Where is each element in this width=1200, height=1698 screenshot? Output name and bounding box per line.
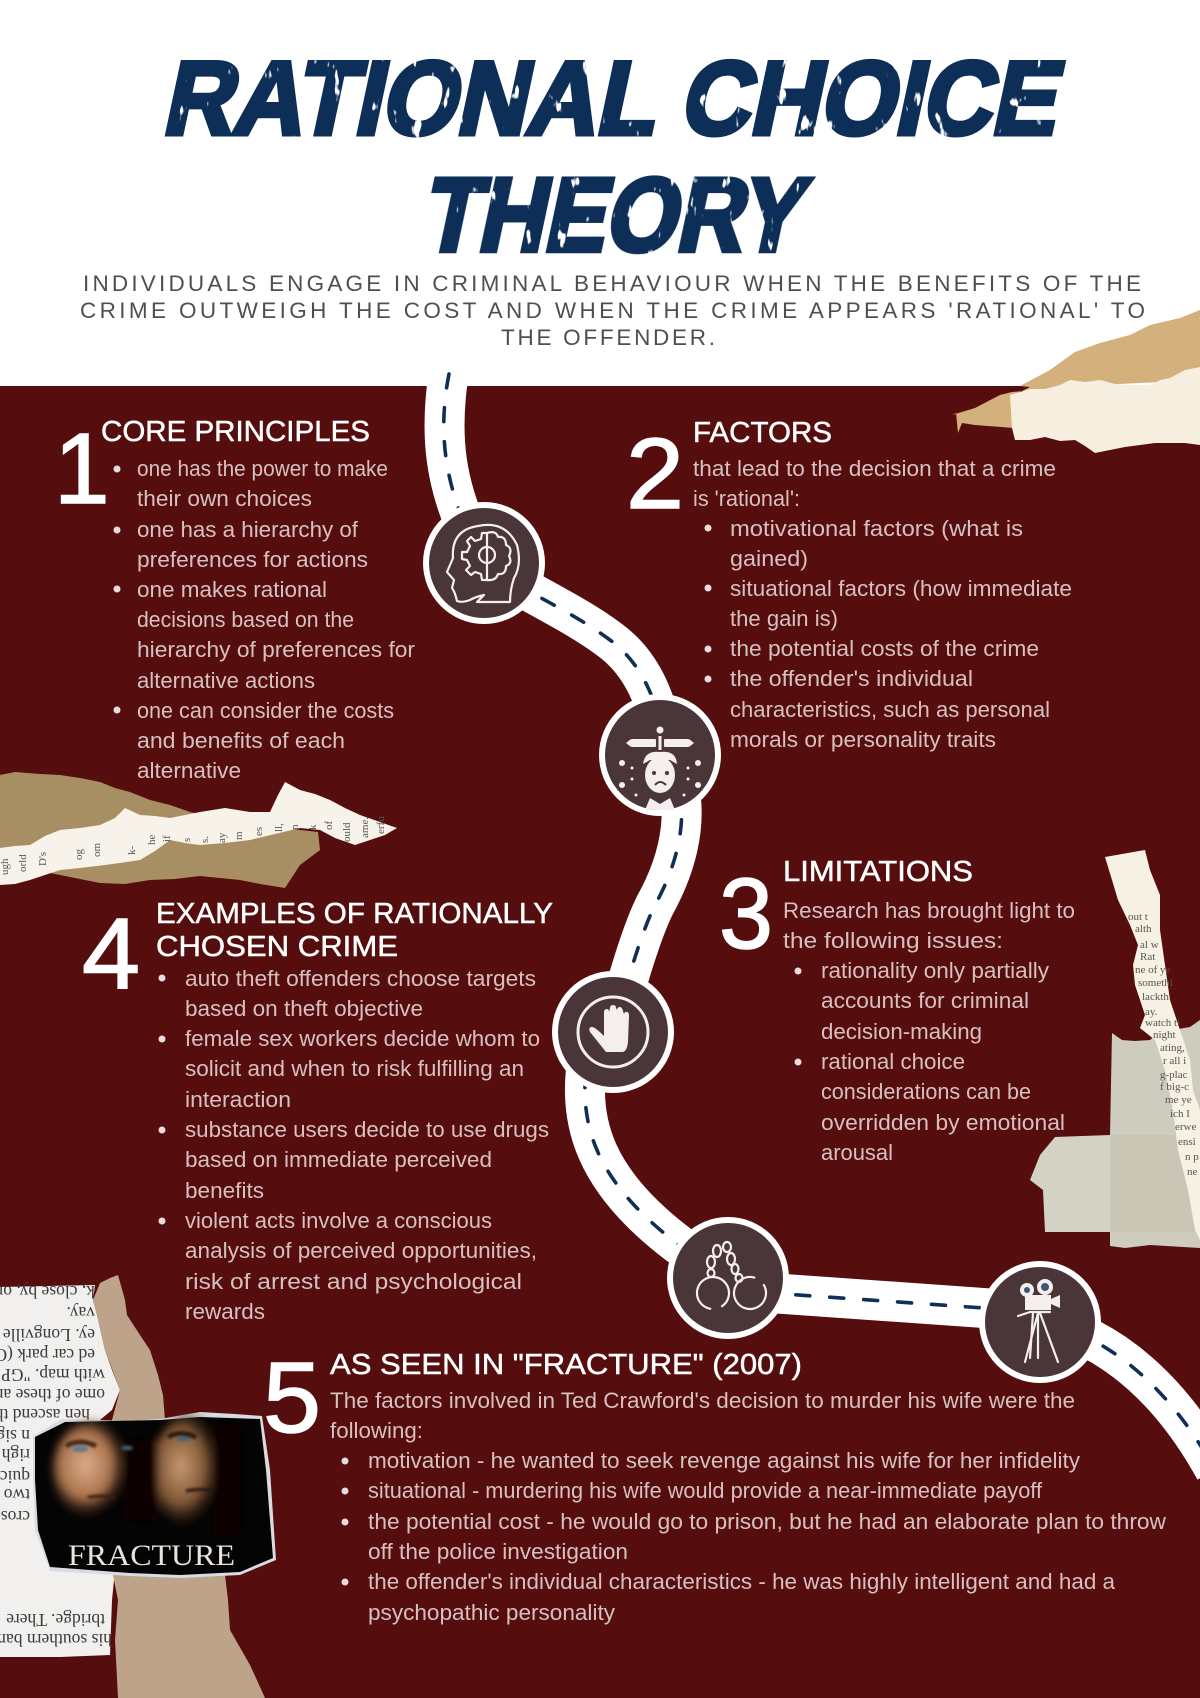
section 5: as seen in Fracture: psychopathic personality	[368, 1600, 615, 1625]
section 2: factors	[626, 417, 1072, 752]
section 2: factors: situational factors (how immediate	[730, 576, 1072, 601]
section 5: as seen in Fracture: The factors involved in Ted Crawford's decision to murder his wife were the	[330, 1388, 1075, 1413]
section 5: as seen in Fracture: motivation - he wanted to seek revenge against his wife for her infidelity	[368, 1448, 1080, 1473]
torn paper: right side tape and page: erwe	[1175, 1121, 1196, 1133]
torn paper and movie poster: bottom left collage: vay.	[66, 1303, 95, 1323]
torn paper: right side tape and page: somethi	[1138, 977, 1173, 989]
section 5: as seen in Fracture: the potential cost - he would go to prison, but he had an elaborate plan to throw	[368, 1509, 1166, 1534]
section 2: factors: morals or personality traits	[730, 727, 996, 752]
torn paper: right side tape and page: out t	[1128, 911, 1148, 923]
torn paper: right side tape and page	[1030, 850, 1200, 1248]
section 1: core principles: alternative	[137, 758, 241, 783]
node: handcuffs icon	[667, 1217, 789, 1339]
torn paper: middle left: n	[289, 824, 301, 830]
section 1: core principles: alternative actions	[137, 668, 315, 693]
section 4: examples of rationally chosen crime: solicit and when to risk fulfilling an	[185, 1056, 524, 1081]
section 4: examples of rationally chosen crime: risk of arrest and psychological	[185, 1269, 522, 1294]
section 3: limitations: accounts for criminal	[821, 988, 1029, 1013]
section 2: factors: the offender's individual	[730, 666, 973, 691]
section 4: examples of rationally chosen crime: auto theft offenders choose targets	[185, 966, 536, 991]
node: person at signpost icon	[599, 694, 721, 816]
section 3: limitations: 3	[719, 858, 773, 970]
torn paper: right side tape and page: ating,	[1160, 1042, 1185, 1054]
section 4: examples of rationally chosen crime: benefits	[185, 1178, 264, 1203]
section 2: factors: is 'rational':	[693, 486, 800, 511]
torn paper: right side tape and page: n p	[1185, 1151, 1199, 1163]
section 3: limitations: considerations can be	[821, 1079, 1031, 1104]
torn paper: right side tape and page: r all i	[1163, 1055, 1186, 1067]
section 3: limitations	[719, 856, 1075, 1165]
torn paper and movie poster: bottom left collage: righ	[2, 1445, 30, 1465]
section 1: core principles: one makes rational	[137, 577, 327, 602]
title: RATIONAL CHOICE	[156, 41, 1074, 157]
section 3: limitations: rational choice	[821, 1049, 965, 1074]
section 4: examples of rationally chosen crime: EXAMPLES OF RATIONALLY	[156, 898, 553, 930]
torn paper: right side tape and page: g-plac	[1160, 1069, 1188, 1081]
section 4: examples of rationally chosen crime: female sex workers decide whom to	[185, 1026, 540, 1051]
node: film camera on tripod icon	[979, 1261, 1101, 1383]
section 5: as seen in Fracture: 5	[263, 1342, 321, 1454]
torn paper: right side tape and page: f big-c	[1160, 1081, 1189, 1093]
section 3: limitations: arousal	[821, 1140, 893, 1165]
torn paper: middle left: ame.	[359, 817, 371, 838]
torn paper: right side tape and page: ay.	[1145, 1006, 1158, 1018]
torn paper: right side tape and page: ne	[1187, 1166, 1198, 1178]
torn paper: middle left: k-	[126, 846, 138, 855]
section 2: factors: 2	[626, 418, 684, 530]
section 1: core principles: preferences for actions	[137, 547, 368, 572]
section 5: as seen in Fracture: the offender's individual characteristics - he was highly intelligent and had a	[368, 1569, 1116, 1594]
torn paper: right side tape and page: alth	[1135, 923, 1152, 935]
torn paper and movie poster: bottom left collage	[0, 1275, 276, 1698]
torn paper: top right	[952, 310, 1200, 453]
section 1: core principles: one has a hierarchy of	[137, 517, 359, 542]
torn paper: middle left: if	[161, 835, 173, 842]
section 2: factors: gained)	[730, 546, 808, 571]
section 4: examples of rationally chosen crime: based on theft objective	[185, 996, 423, 1021]
section 4: examples of rationally chosen crime: rewards	[185, 1299, 265, 1324]
section 4: examples of rationally chosen crime: substance users decide to use drugs	[185, 1117, 549, 1142]
section 5: as seen in Fracture: situational - murdering his wife would provide a near-immediate payoff	[368, 1478, 1043, 1503]
section 3: limitations: LIMITATIONS	[783, 856, 973, 888]
section 4: examples of rationally chosen crime: analysis of perceived opportunities,	[185, 1238, 537, 1263]
torn paper: middle left: ll,	[273, 823, 285, 832]
torn paper: middle left: s.	[199, 836, 211, 843]
section 2: factors: the gain is)	[730, 606, 838, 631]
torn paper: middle left: of	[323, 820, 335, 830]
section 5: as seen in Fracture: following:	[330, 1418, 423, 1443]
torn paper and movie poster: bottom left collage: FRACTURE	[68, 1539, 235, 1572]
torn paper: middle left: orld	[17, 854, 29, 872]
torn paper and movie poster: bottom left collage: quic	[0, 1467, 30, 1487]
torn paper: middle left: es	[253, 827, 265, 836]
section 3: limitations: rationality only partially	[821, 958, 1049, 983]
torn paper: middle left	[0, 772, 397, 888]
torn paper and movie poster: bottom left collage: cros	[1, 1507, 30, 1527]
section 3: limitations: decision-making	[821, 1019, 982, 1044]
section 1: core principles: and benefits of each	[137, 728, 345, 753]
section 1: core principles: CORE PRINCIPLES	[101, 416, 370, 448]
section 3: limitations: overridden by emotional	[821, 1110, 1065, 1135]
title	[156, 41, 1074, 274]
section 2: factors: motivational factors (what is	[730, 516, 1023, 541]
torn paper: middle left: D's	[37, 852, 49, 866]
section 1: core principles: hierarchy of preferences for	[137, 637, 415, 662]
torn paper: right side tape and page: ich I	[1170, 1108, 1190, 1120]
section 4: examples of rationally chosen crime: 4	[82, 898, 140, 1010]
section 4: examples of rationally chosen crime: based on immediate perceived	[185, 1147, 492, 1172]
torn paper: middle left: ould	[341, 822, 353, 842]
section 1: core principles: their own choices	[137, 486, 312, 511]
subtitle definition: CRIME OUTWEIGH THE COST AND WHEN THE CRIME APPEARS 'RATIONAL' TO	[80, 298, 1145, 323]
torn paper: right side tape and page: night	[1153, 1029, 1176, 1041]
section 1: core principles: decisions based on the	[137, 607, 354, 632]
torn paper: middle left: m	[233, 831, 245, 840]
torn paper: middle left: ay	[216, 832, 228, 843]
section 2: factors: that lead to the decision that a crime	[693, 456, 1056, 481]
torn paper: middle left: s	[181, 838, 193, 842]
torn paper and movie poster: bottom left collage: k, close by, or	[0, 1282, 95, 1302]
torn paper and movie poster: bottom left collage: with map. "GP	[1, 1365, 105, 1385]
title: THEORY	[415, 158, 818, 274]
torn paper: middle left: k	[307, 824, 319, 830]
subtitle definition: THE OFFENDER.	[501, 325, 715, 350]
section 1: core principles	[54, 413, 415, 783]
section 2: factors: FACTORS	[693, 417, 832, 449]
section 4: examples of rationally chosen crime: violent acts involve a conscious	[185, 1208, 492, 1233]
torn paper: right side tape and page: al w	[1140, 939, 1159, 951]
torn paper: right side tape and page: ne of ye	[1135, 964, 1171, 976]
maroon background panel	[0, 386, 1200, 1698]
subtitle definition: INDIVIDUALS ENGAGE IN CRIMINAL BEHAVIOUR WHEN THE BENEFITS OF THE	[83, 271, 1141, 296]
section 4: examples of rationally chosen crime: CHOSEN CRIME	[156, 931, 398, 963]
torn paper: middle left: om	[91, 842, 103, 857]
torn paper: middle left: og	[73, 848, 85, 860]
section 3: limitations: Research has brought light to	[783, 898, 1075, 923]
torn paper: right side tape and page: watch ti	[1145, 1017, 1180, 1029]
node: stop hand icon	[552, 971, 674, 1093]
torn paper and movie poster: bottom left collage: his southern ban	[0, 1630, 112, 1650]
section 1: core principles: one has the power to make	[137, 456, 388, 481]
section 1: core principles: 1	[54, 413, 110, 525]
torn paper: middle left: erfu	[375, 816, 387, 834]
section 3: limitations: the following issues:	[783, 928, 1003, 953]
winding road	[444, 360, 1200, 1470]
torn paper: right side tape and page: Rat	[1140, 951, 1155, 963]
section 5: as seen in Fracture: off the police investigation	[368, 1539, 628, 1564]
section 4: examples of rationally chosen crime: interaction	[185, 1087, 291, 1112]
torn paper: middle left: he	[146, 834, 158, 845]
section 5: as seen in Fracture	[263, 1342, 1166, 1625]
node: head with gears icon	[423, 502, 545, 624]
section 2: factors: characteristics, such as personal	[730, 697, 1050, 722]
torn paper: right side tape and page: me ye	[1165, 1094, 1192, 1106]
section 2: factors: the potential costs of the crime	[730, 636, 1039, 661]
torn paper and movie poster: bottom left collage: ey. Longville	[3, 1325, 95, 1345]
torn paper and movie poster: bottom left collage: tbridge. There	[6, 1610, 105, 1630]
section 1: core principles: one can consider the costs	[137, 698, 394, 723]
subtitle definition	[80, 271, 1145, 350]
section 4: examples of rationally chosen crime	[82, 898, 553, 1324]
torn paper: right side tape and page: ensi	[1178, 1136, 1196, 1148]
section 5: as seen in Fracture: AS SEEN IN "FRACTURE" (2007)	[330, 1349, 802, 1381]
torn paper: right side tape and page: lackth	[1142, 991, 1169, 1003]
